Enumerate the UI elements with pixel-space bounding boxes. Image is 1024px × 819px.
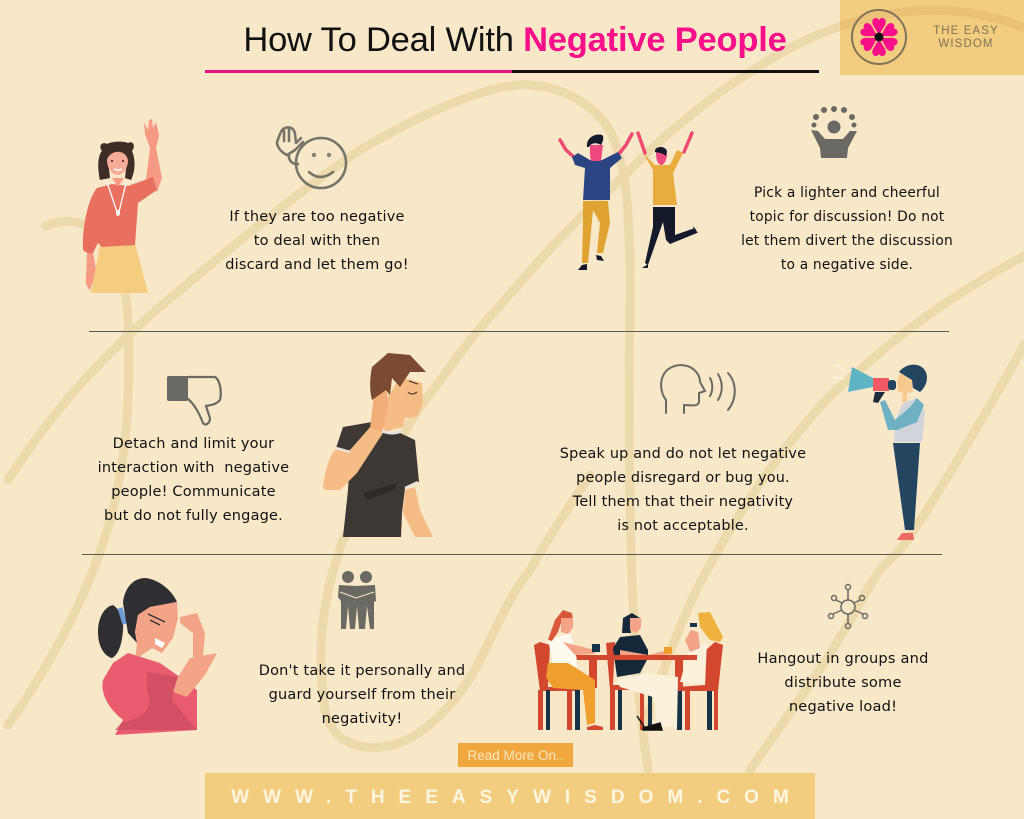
text: personally tip [259,663,465,727]
read more button [458,743,573,767]
text: hangout tip: negative load! [789,698,897,715]
logo text [933,25,999,50]
text: detach tip [98,436,289,524]
website banner: WWW.THEEASYWISDOM.COM [231,787,803,808]
panel: detach [98,353,433,537]
panel: don't take personally [98,571,465,735]
text: lighter topic tip: topic for discussion! Do not [750,209,944,225]
text: hangout tip [757,650,929,715]
text: lighter topic tip: let them divert the discussion [741,233,953,249]
text: lighter topic tip: to a negative side. [781,257,913,273]
illustration: man cupping ear [323,353,433,537]
illustration: three women at table [534,610,723,731]
panel: hangout in groups [534,584,929,731]
illustration: two jumping men [558,131,698,270]
text: lighter topic tip [741,185,953,273]
illustration: waving woman [82,119,162,293]
icon: speaking head [660,364,736,414]
text: lighter topic tip: Pick a lighter and cheerful [754,185,940,201]
panel: speak up [560,364,927,540]
text: detach tip: interaction with negative [98,460,289,476]
text: personally tip: negativity! [322,711,402,727]
text: personally tip: guard yourself from their [269,687,455,703]
text: discard tip: If they are too negative [229,209,405,225]
illustration: man with megaphone [833,364,927,540]
text: discard tip: discard and let them go! [225,257,409,273]
logo swirl overlay [840,6,1024,32]
icon: network hub [828,584,868,630]
icon: waving smiley [276,126,348,190]
text: detach tip: Detach and limit your [113,436,274,452]
text: hangout tip: distribute some [784,674,902,691]
title underline [205,70,819,73]
text: hangout tip: Hangout in groups and [757,650,929,667]
logo block [840,0,1024,75]
text: personally tip: Don't take it personally and [259,663,465,679]
text: discard tip: to deal with then [254,233,380,249]
text: speak up tip: people disregard or bug you. [576,470,790,486]
icon: person with dots [811,106,857,158]
text: speak up tip: Speak up and do not let negative [560,446,806,462]
text: speak up tip: is not acceptable. [617,518,749,534]
text: discard tip [225,209,409,273]
text: detach tip: but do not fully engage. [104,508,283,524]
logo flower icon [851,9,907,65]
website banner [205,773,815,819]
logo text: THE EASY [933,25,999,37]
panel: discard [82,119,409,293]
read more button: Read More On.. [467,748,564,763]
text: speak up tip: Tell them that their negativity [573,494,793,510]
logo text: WISDOM [938,38,994,50]
text: speak up tip [560,446,806,534]
panel: lighter topic [558,106,953,273]
icon: thumbs down [167,376,222,426]
text: detach tip: people! Communicate [111,484,276,500]
title: How To Deal With Negative People [243,21,787,59]
illustration: stressed woman [98,578,217,735]
icon: two embracing people [338,571,376,629]
